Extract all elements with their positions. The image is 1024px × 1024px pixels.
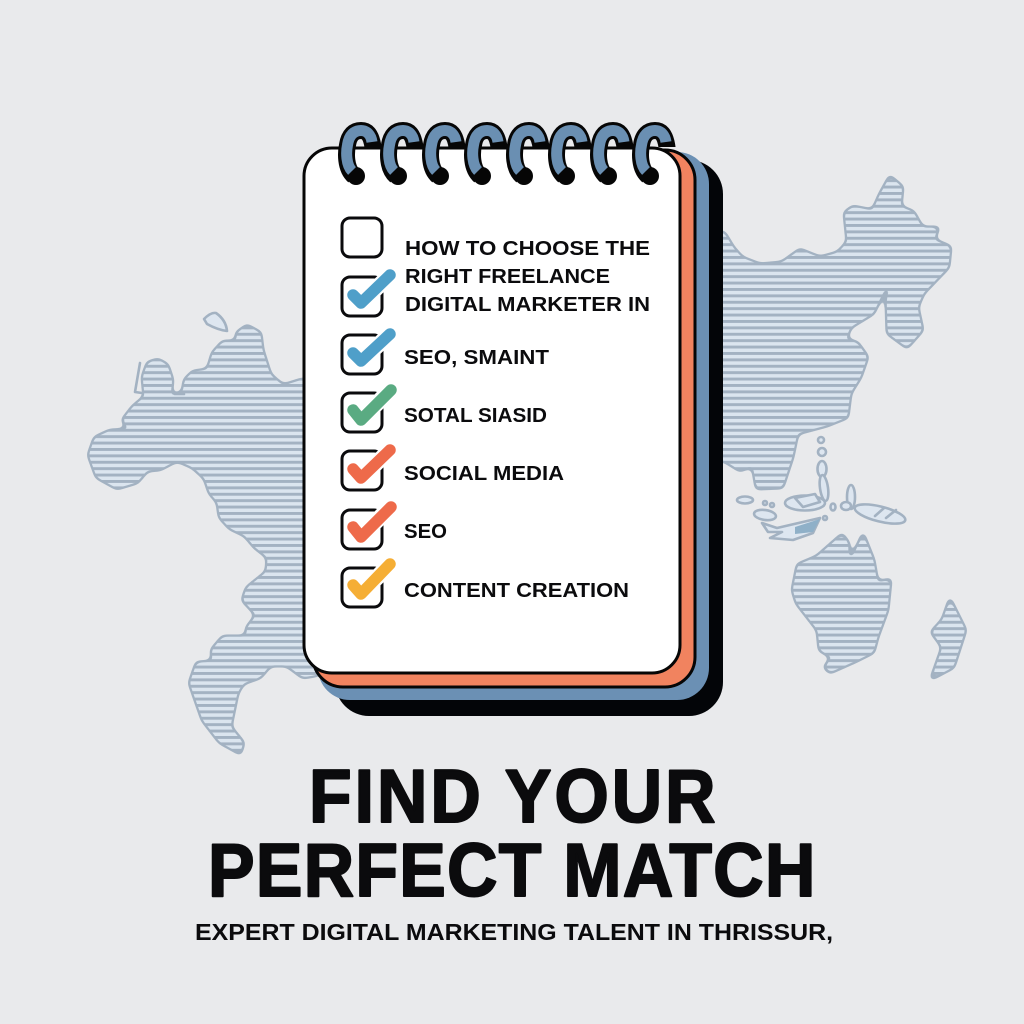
striped world map [87,176,967,754]
ring 4 [473,130,500,185]
empty checkbox [342,218,382,257]
item label: SEO: SEO [404,521,447,543]
front page [304,148,680,673]
notebook back cover: black [335,160,723,716]
title: FIND YOUR [309,755,715,839]
ring 8 [641,130,668,185]
title: PERFECT MATCH [208,829,815,913]
item label: SOTAL SIASID: SOTAL SIASID [404,405,547,427]
item label: CONTENT CREATION: CONTENT CREATION [404,580,629,602]
checkbox: blue check 2 [342,333,391,374]
back sheet: blue [318,152,709,700]
notebook [304,130,723,716]
ring 6 [557,130,584,185]
item label: SEO, SMAINT: SEO, SMAINT [404,347,549,369]
middle sheet: orange [313,150,695,687]
checkbox: green check [342,389,391,432]
ring 5 [515,130,542,185]
ring 2 [389,130,416,185]
checklist heading: HOW TO CHOOSE THE [405,238,650,260]
title [208,755,815,913]
checklist [342,218,650,607]
ring 7 [599,130,626,185]
spiral binding [347,130,668,185]
checklist heading: RIGHT FREELANCE [405,266,610,288]
ring 3 [431,130,458,185]
checkbox: red check 2 [342,506,391,549]
map landmasses [87,176,967,754]
checkbox: yellow check [342,563,391,607]
map islands [135,313,907,540]
subtitle: EXPERT DIGITAL MARKETING TALENT IN THRISSUR, [195,919,833,945]
item label: SOCIAL MEDIA: SOCIAL MEDIA [404,463,564,485]
checklist heading: DIGITAL MARKETER IN [405,294,650,316]
ring 1 [347,130,374,185]
checklist heading [405,238,650,316]
checkbox: blue check 1 [342,274,391,316]
checkbox: red check 1 [342,449,391,490]
